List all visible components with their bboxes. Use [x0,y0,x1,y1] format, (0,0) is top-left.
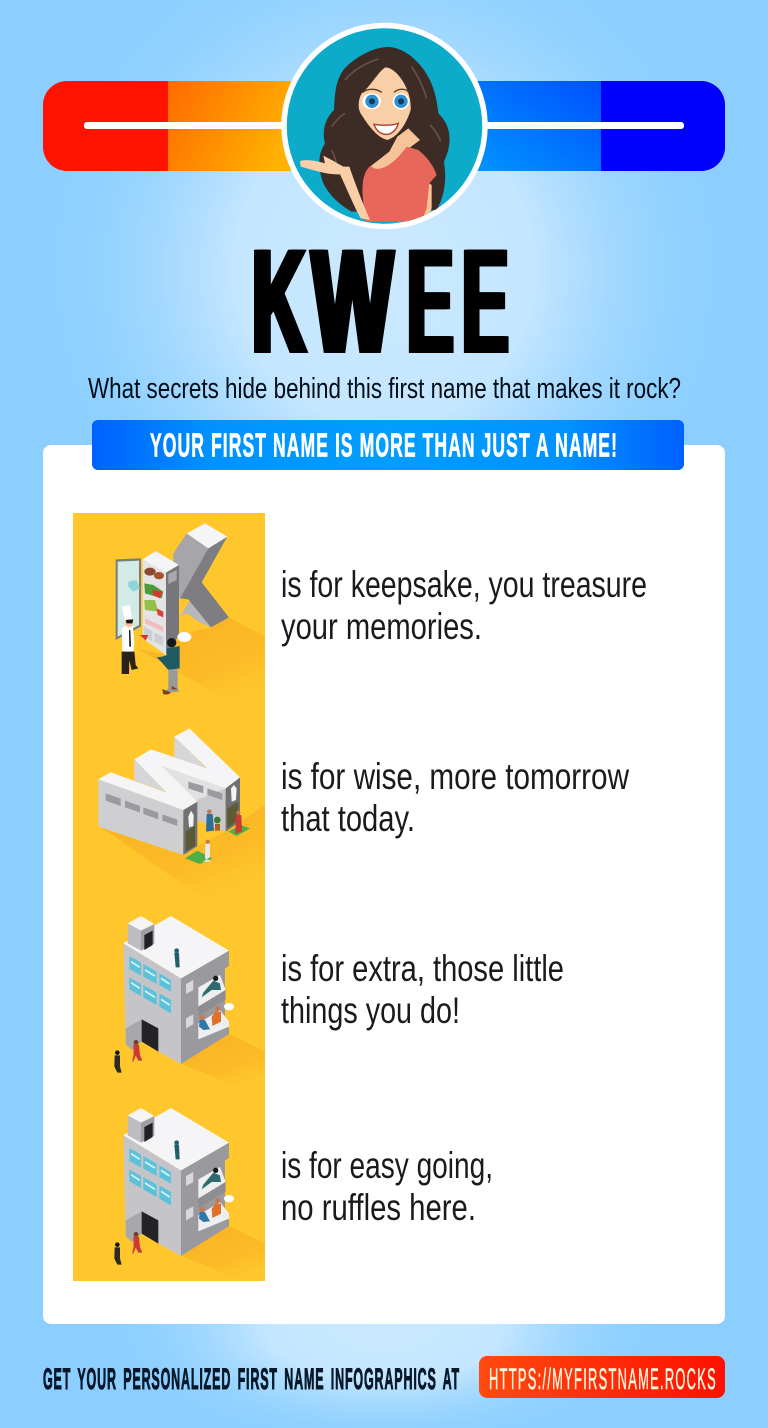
text: E [281,948,564,1031]
icon: letter E building, second copy [114,1108,265,1279]
text: E second: no ruffles here. [281,1187,476,1228]
text: K: your memories. [281,606,482,647]
title: KWEE: E [462,217,509,385]
text: W: is for wise, more tomorrow [281,756,629,797]
main white card [43,445,725,1324]
header colour bar [43,81,725,171]
portrait of a smiling woman [284,26,485,226]
banner [92,420,684,470]
icon: letter E building [114,916,265,1087]
text: E second: is for easy going, [281,1145,493,1186]
text: K [281,564,647,647]
title: KWEE: W [312,217,393,385]
text: K: is for keepsake, you treasure [281,564,647,605]
icon: letter W building [98,728,265,897]
panel: yellow illustration column [73,513,265,1281]
text: W [281,756,629,839]
icon: letter K building with open fridge [116,523,265,703]
title: KWEE: E [407,217,454,385]
text: E: is for extra, those little [281,948,564,989]
text: W: that today. [281,798,415,839]
text: E: things you do! [281,990,460,1031]
title: KWEE: K [252,217,306,385]
text: E second [281,1145,493,1228]
footer link button [479,1356,725,1398]
title: KWEE [252,217,509,385]
